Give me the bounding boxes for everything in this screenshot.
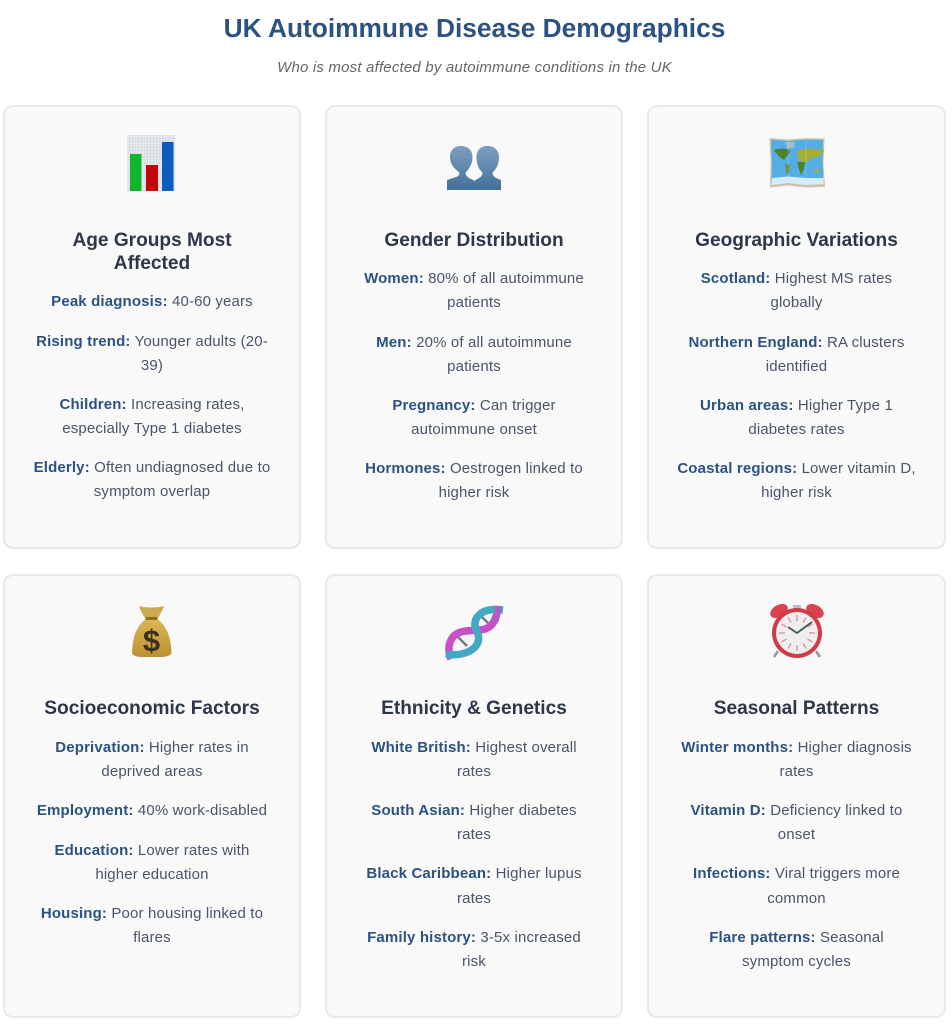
- icon: money bag: [132, 606, 172, 658]
- text: coastal regions: Coastal regions: Lower vitamin D,: [677, 460, 916, 477]
- text: winter months: Winter months: Higher diagnosis: [681, 739, 912, 756]
- text: urban areas line 2: diabetes rates: [748, 421, 845, 438]
- heading: Geographic Variations: [695, 230, 898, 251]
- icon: bar chart: [127, 135, 175, 191]
- text: scotland: Scotland: Highest MS rates: [701, 270, 892, 287]
- text: housing: Housing: Poor housing linked to: [41, 905, 263, 922]
- heading: Gender Distribution: [384, 230, 564, 251]
- heading: Seasonal Patterns: [714, 698, 879, 719]
- text: men: Men: 20% of all autoimmune: [376, 334, 572, 351]
- text: deprivation line 2: deprived areas: [101, 763, 203, 780]
- panel: age groups: [3, 105, 301, 549]
- text: peak diagnosis: Peak diagnosis: 40-60 years: [51, 293, 253, 310]
- text: education line 2: higher education: [95, 866, 209, 883]
- text: women line 2: patients: [447, 294, 501, 311]
- text: employment: Employment: 40% work-disabled: [37, 802, 267, 819]
- subtitle: Who is most affected by autoimmune conditions in the UK: [277, 59, 672, 76]
- panel: socioeconomic factors: [3, 574, 301, 1018]
- text: hormones line 2: higher risk: [439, 484, 509, 501]
- text: family history: Family history: 3-5x increased: [367, 929, 581, 946]
- text: winter months line 2: rates: [779, 763, 814, 780]
- text: elderly line 2: symptom overlap: [94, 483, 210, 500]
- icon: alarm clock: [770, 604, 824, 658]
- text: south asian: South Asian: Higher diabetes: [371, 802, 577, 819]
- icon: dna helix: [445, 606, 504, 660]
- panel: geographic variations: [647, 105, 946, 549]
- text: vitamin d: Vitamin D: Deficiency linked to: [691, 802, 902, 819]
- text: hormones: Hormones: Oestrogen linked to: [365, 460, 583, 477]
- text: vitamin d line 2: onset: [778, 826, 815, 843]
- text: rising trend: Rising trend: Younger adults (20-: [36, 333, 268, 350]
- heading: Ethnicity & Genetics: [381, 698, 567, 719]
- text: education: Education: Lower rates with: [55, 842, 249, 859]
- heading: Socioeconomic Factors: [44, 698, 260, 719]
- icon: world map: [770, 138, 825, 188]
- text: infections: Infections: Viral triggers more: [693, 865, 900, 882]
- text: northern england line 2: identified: [766, 358, 827, 375]
- text: family history line 2: risk: [462, 953, 486, 970]
- text: women: Women: 80% of all autoimmune: [364, 270, 584, 287]
- text: housing line 2: flares: [133, 929, 171, 946]
- text: white british line 2: rates: [457, 763, 491, 780]
- text: coastal regions line 2: higher risk: [761, 484, 832, 501]
- text: infections line 2: common: [767, 890, 826, 907]
- text: flare patterns line 2: symptom cycles: [742, 953, 851, 970]
- text: northern england: Northern England: RA clusters: [688, 334, 905, 351]
- panel: ethnicity and genetics: [325, 574, 623, 1018]
- text: pregnancy: Pregnancy: Can trigger: [392, 397, 556, 414]
- heading line 2: Affected: [114, 253, 190, 274]
- text: children line 2: especially Type 1 diabetes: [62, 420, 242, 437]
- icon: money bag: $: [143, 623, 160, 658]
- text: black caribbean line 2: rates: [457, 890, 491, 907]
- icon: two silhouettes: [447, 146, 501, 190]
- text: children: Children: Increasing rates,: [60, 396, 244, 413]
- text: urban areas: Urban areas: Higher Type 1: [700, 397, 893, 414]
- text: white british: White British: Highest overall: [371, 739, 577, 756]
- panel: gender distribution: [325, 105, 623, 549]
- title: UK Autoimmune Disease Demographics: [224, 13, 725, 43]
- text: south asian line 2: rates: [457, 826, 491, 843]
- text: deprivation: Deprivation: Higher rates in: [55, 739, 249, 756]
- text: rising trend line 2: 39): [141, 357, 163, 374]
- panel: seasonal patterns: [647, 574, 946, 1018]
- text: pregnancy line 2: autoimmune onset: [411, 421, 537, 438]
- heading: Age Groups Most: [72, 230, 232, 251]
- text: men line 2: patients: [447, 358, 501, 375]
- text: scotland line 2: globally: [770, 294, 823, 311]
- text: black caribbean: Black Caribbean: Higher lupus: [366, 865, 582, 882]
- text: elderly: Elderly: Often undiagnosed due to: [34, 459, 270, 476]
- text: flare patterns: Flare patterns: Seasonal: [709, 929, 884, 946]
